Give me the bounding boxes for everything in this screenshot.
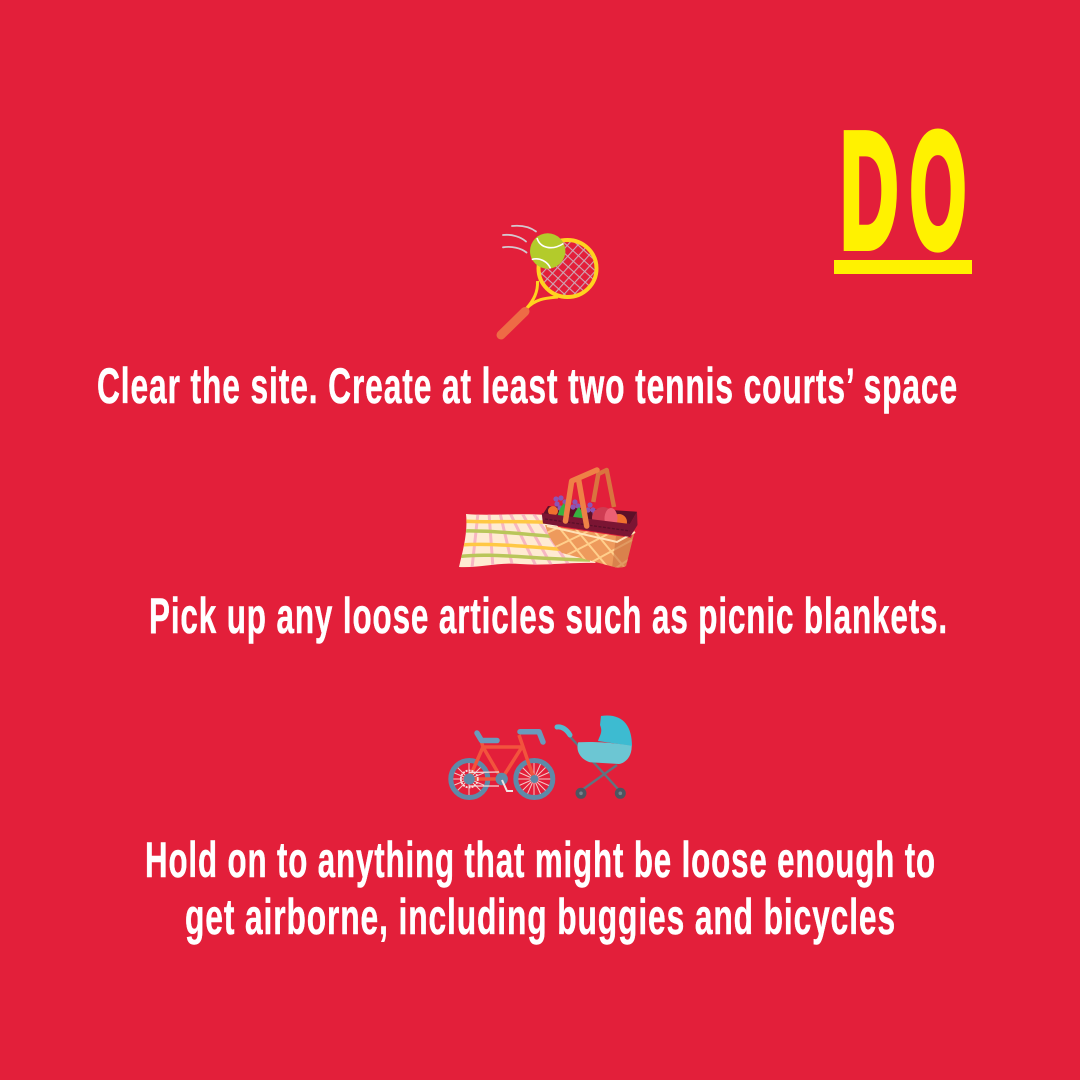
basket back handle	[593, 470, 614, 507]
basket contents	[548, 495, 627, 530]
icon: bicycle and pram	[451, 716, 632, 799]
icon: tennis racket and ball	[501, 226, 596, 335]
basket interior	[543, 506, 637, 524]
heading: DO: D	[840, 99, 898, 282]
infographic canvas	[98, 128, 972, 945]
icon: picnic blanket and basket	[455, 470, 640, 574]
basket body	[545, 525, 635, 568]
infographic canvas: O	[910, 99, 966, 282]
bicycle	[451, 732, 553, 798]
basket rim	[542, 512, 638, 537]
pram	[557, 716, 632, 799]
picnic blanket	[455, 513, 596, 568]
basket front handle	[566, 470, 597, 526]
